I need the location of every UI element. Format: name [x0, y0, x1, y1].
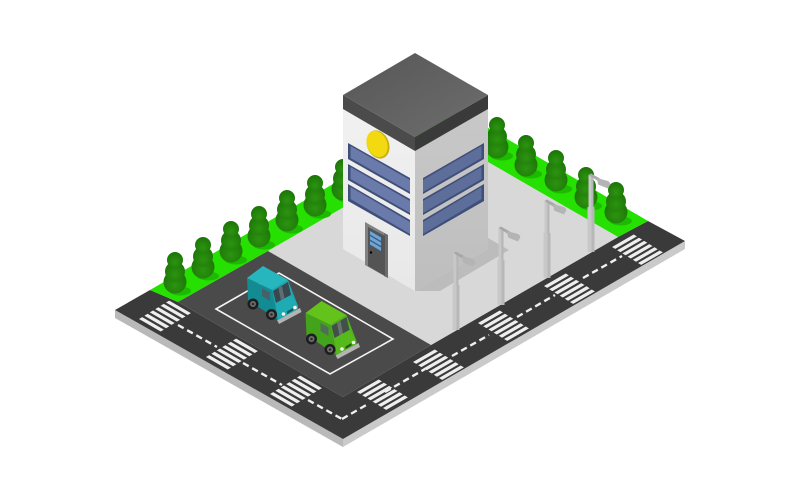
roof — [343, 53, 488, 151]
trees: left row — [164, 159, 359, 296]
parking lot — [178, 251, 431, 397]
sidewalk plaza — [268, 143, 618, 345]
left wall — [343, 105, 415, 291]
road centre dashes — [178, 256, 622, 419]
van: teal — [247, 266, 302, 324]
grass strip — [150, 111, 648, 302]
road — [115, 221, 685, 439]
right windows — [423, 143, 484, 236]
building shadow — [415, 238, 509, 291]
parking bay outline — [216, 273, 393, 374]
van: green — [306, 301, 360, 359]
door — [365, 222, 388, 278]
left windows — [348, 143, 410, 236]
trees: right row — [486, 117, 632, 226]
yellow round sign — [362, 127, 394, 162]
building — [343, 53, 488, 291]
base slab — [115, 241, 685, 447]
street lamps — [452, 174, 610, 330]
right wall — [415, 105, 488, 291]
crosswalks — [139, 234, 663, 410]
